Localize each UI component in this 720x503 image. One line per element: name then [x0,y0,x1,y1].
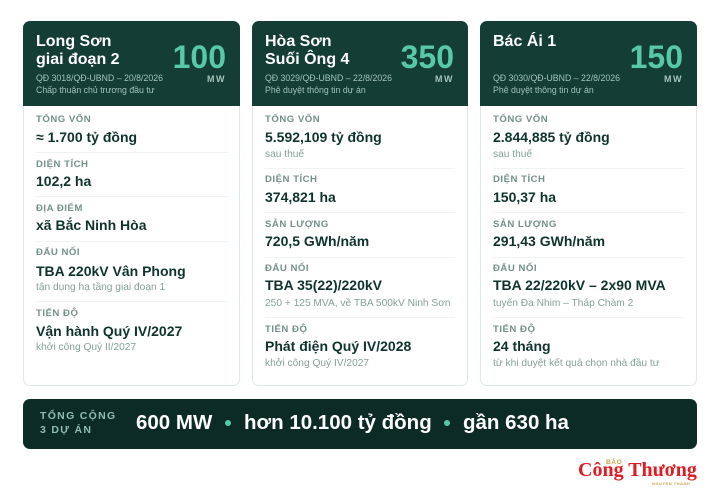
logo: Báo Công Thương: NGUYEN THANH [652,481,690,486]
panel: Bác Ái 1: 24 tháng [493,338,551,354]
panel: Long Sơn giai đoạn 2: Vận hành Quý IV/2027 [36,323,182,339]
separator dot [444,420,450,426]
summary bar [23,399,697,449]
separator dot [225,420,231,426]
summary bar: hơn 10.100 tỷ đồng [244,411,432,434]
panel: Bác Ái 1: TỔNG VỐN [493,114,548,125]
panel: Bác Ái 1: DIỆN TÍCH [493,174,545,185]
summary figures: 600 MW [136,411,212,434]
card header: Long Sơn: MW [207,74,226,84]
panel: Long Sơn giai đoạn 2: tận dụng hạ tầng giai đoạn 1 [36,282,165,292]
card header: Long Sơn [23,21,240,106]
card header: Bác Ái 1: 150 [630,39,683,75]
panel: Long Sơn giai đoạn 2 [23,21,240,386]
card header: Long Sơn: QĐ 3018/QĐ-UBND – 20/8/2026 [36,73,163,83]
panel: Bác Ái 1: 150,37 ha [493,189,556,205]
card header: Bác Ái 1 [480,21,697,106]
panel: Hòa Sơn Suối Ông 4: sau thuế [265,148,304,160]
panel: Hòa Sơn Suối Ông 4: ĐẤU NỐI [265,263,309,274]
panel: Long Sơn giai đoạn 2: DIỆN TÍCH [36,159,88,170]
card header: Bác Ái 1: QĐ 3030/QĐ-UBND – 22/8/2026 [493,73,620,83]
panel: Hòa Sơn Suối Ông 4: khởi công Quý IV/2027 [265,358,369,368]
panel: Bác Ái 1: 291,43 GWh/năm [493,233,605,249]
card header: Long Sơn: giai đoạn 2 [36,51,120,68]
panel: Hòa Sơn Suối Ông 4: 374,821 ha [265,189,336,205]
panel: Long Sơn giai đoạn 2: ≈ 1.700 tỷ đồng [36,129,137,145]
card header: Hòa Sơn: QĐ 3029/QĐ-UBND – 22/8/2026 [265,73,392,83]
card header: Long Sơn: Long Sơn [36,33,111,50]
card header: Hòa Sơn: 350 [401,39,454,75]
card header: Hòa Sơn [252,21,468,106]
panel: Hòa Sơn Suối Ông 4: TIẾN ĐỘ [265,324,307,335]
card header: Long Sơn: Chấp thuận chủ trương đầu tư [36,85,155,95]
panel: Hòa Sơn Suối Ông 4: SẢN LƯỢNG [265,219,329,230]
panel: Long Sơn giai đoạn 2: ĐẤU NỐI [36,247,80,258]
panel: Long Sơn giai đoạn 2: TBA 220kV Vân Phong [36,263,186,279]
panel: Bác Ái 1: TIẾN ĐỘ [493,324,535,335]
summary label: TỔNG CỘNG [40,410,116,422]
panel: Hòa Sơn Suối Ông 4: TỔNG VỐN [265,114,320,125]
panel: Bác Ái 1: tuyến Đa Nhim – Tháp Chàm 2 [493,298,633,308]
panel: Long Sơn giai đoạn 2: 102,2 ha [36,173,91,189]
panel: Bác Ái 1 [480,21,697,386]
card header: Bác Ái 1: MW [664,74,683,84]
card header: Hòa Sơn: MW [435,74,454,84]
card header: Bác Ái 1: Phê duyệt thông tin dự án [493,85,594,95]
panel: Bác Ái 1: sau thuế [493,148,532,160]
logo: Báo Công Thương: BÁO [606,459,622,466]
card header: Bác Ái 1: Bác Ái 1 [493,33,556,50]
summary label [40,410,116,436]
panel: Hòa Sơn Suối Ông 4: 720,5 GWh/năm [265,233,369,249]
panel: Bác Ái 1: SẢN LƯỢNG [493,219,557,230]
summary bar: gần 630 ha [463,411,569,434]
panel: Hòa Sơn Suối Ông 4 [252,21,468,386]
panel: Hòa Sơn Suối Ông 4: Phát điện Quý IV/2028 [265,338,411,354]
panel: Long Sơn giai đoạn 2: khởi công Quý II/2027 [36,342,136,352]
panel: Long Sơn giai đoạn 2: TỔNG VỐN [36,114,91,125]
summary label: 3 DỰ ÁN [40,424,92,436]
card header: Hòa Sơn: Suối Ông 4 [265,51,349,68]
panel: Long Sơn giai đoạn 2: ĐỊA ĐIỂM [36,203,83,214]
card header: Hòa Sơn: Phê duyệt thông tin dự án [265,85,366,95]
panel: Long Sơn giai đoạn 2: TIẾN ĐỘ [36,308,78,319]
panel: Bác Ái 1: TBA 22/220kV – 2x90 MVA [493,277,666,293]
panel: Hòa Sơn Suối Ông 4: DIỆN TÍCH [265,174,317,185]
card header: Long Sơn: 100 [173,39,226,75]
panel: Bác Ái 1: ĐẤU NỐI [493,263,537,274]
logo: Báo Công Thương: Công Thương [578,459,697,481]
panel: Bác Ái 1: 2.844,885 tỷ đồng [493,129,610,145]
panel: Bác Ái 1: từ khi duyệt kết quả chọn nhà đầu tư [493,358,660,368]
panel: Hòa Sơn Suối Ông 4: 5.592,109 tỷ đồng [265,129,382,145]
panel: Long Sơn giai đoạn 2: xã Bắc Ninh Hòa [36,217,146,233]
panel: Hòa Sơn Suối Ông 4: TBA 35(22)/220kV [265,277,382,293]
panel: Hòa Sơn Suối Ông 4: 250 + 125 MVA, về TBA 500kV Ninh Sơn [265,298,451,308]
card header: Hòa Sơn: Hòa Sơn [265,33,332,50]
